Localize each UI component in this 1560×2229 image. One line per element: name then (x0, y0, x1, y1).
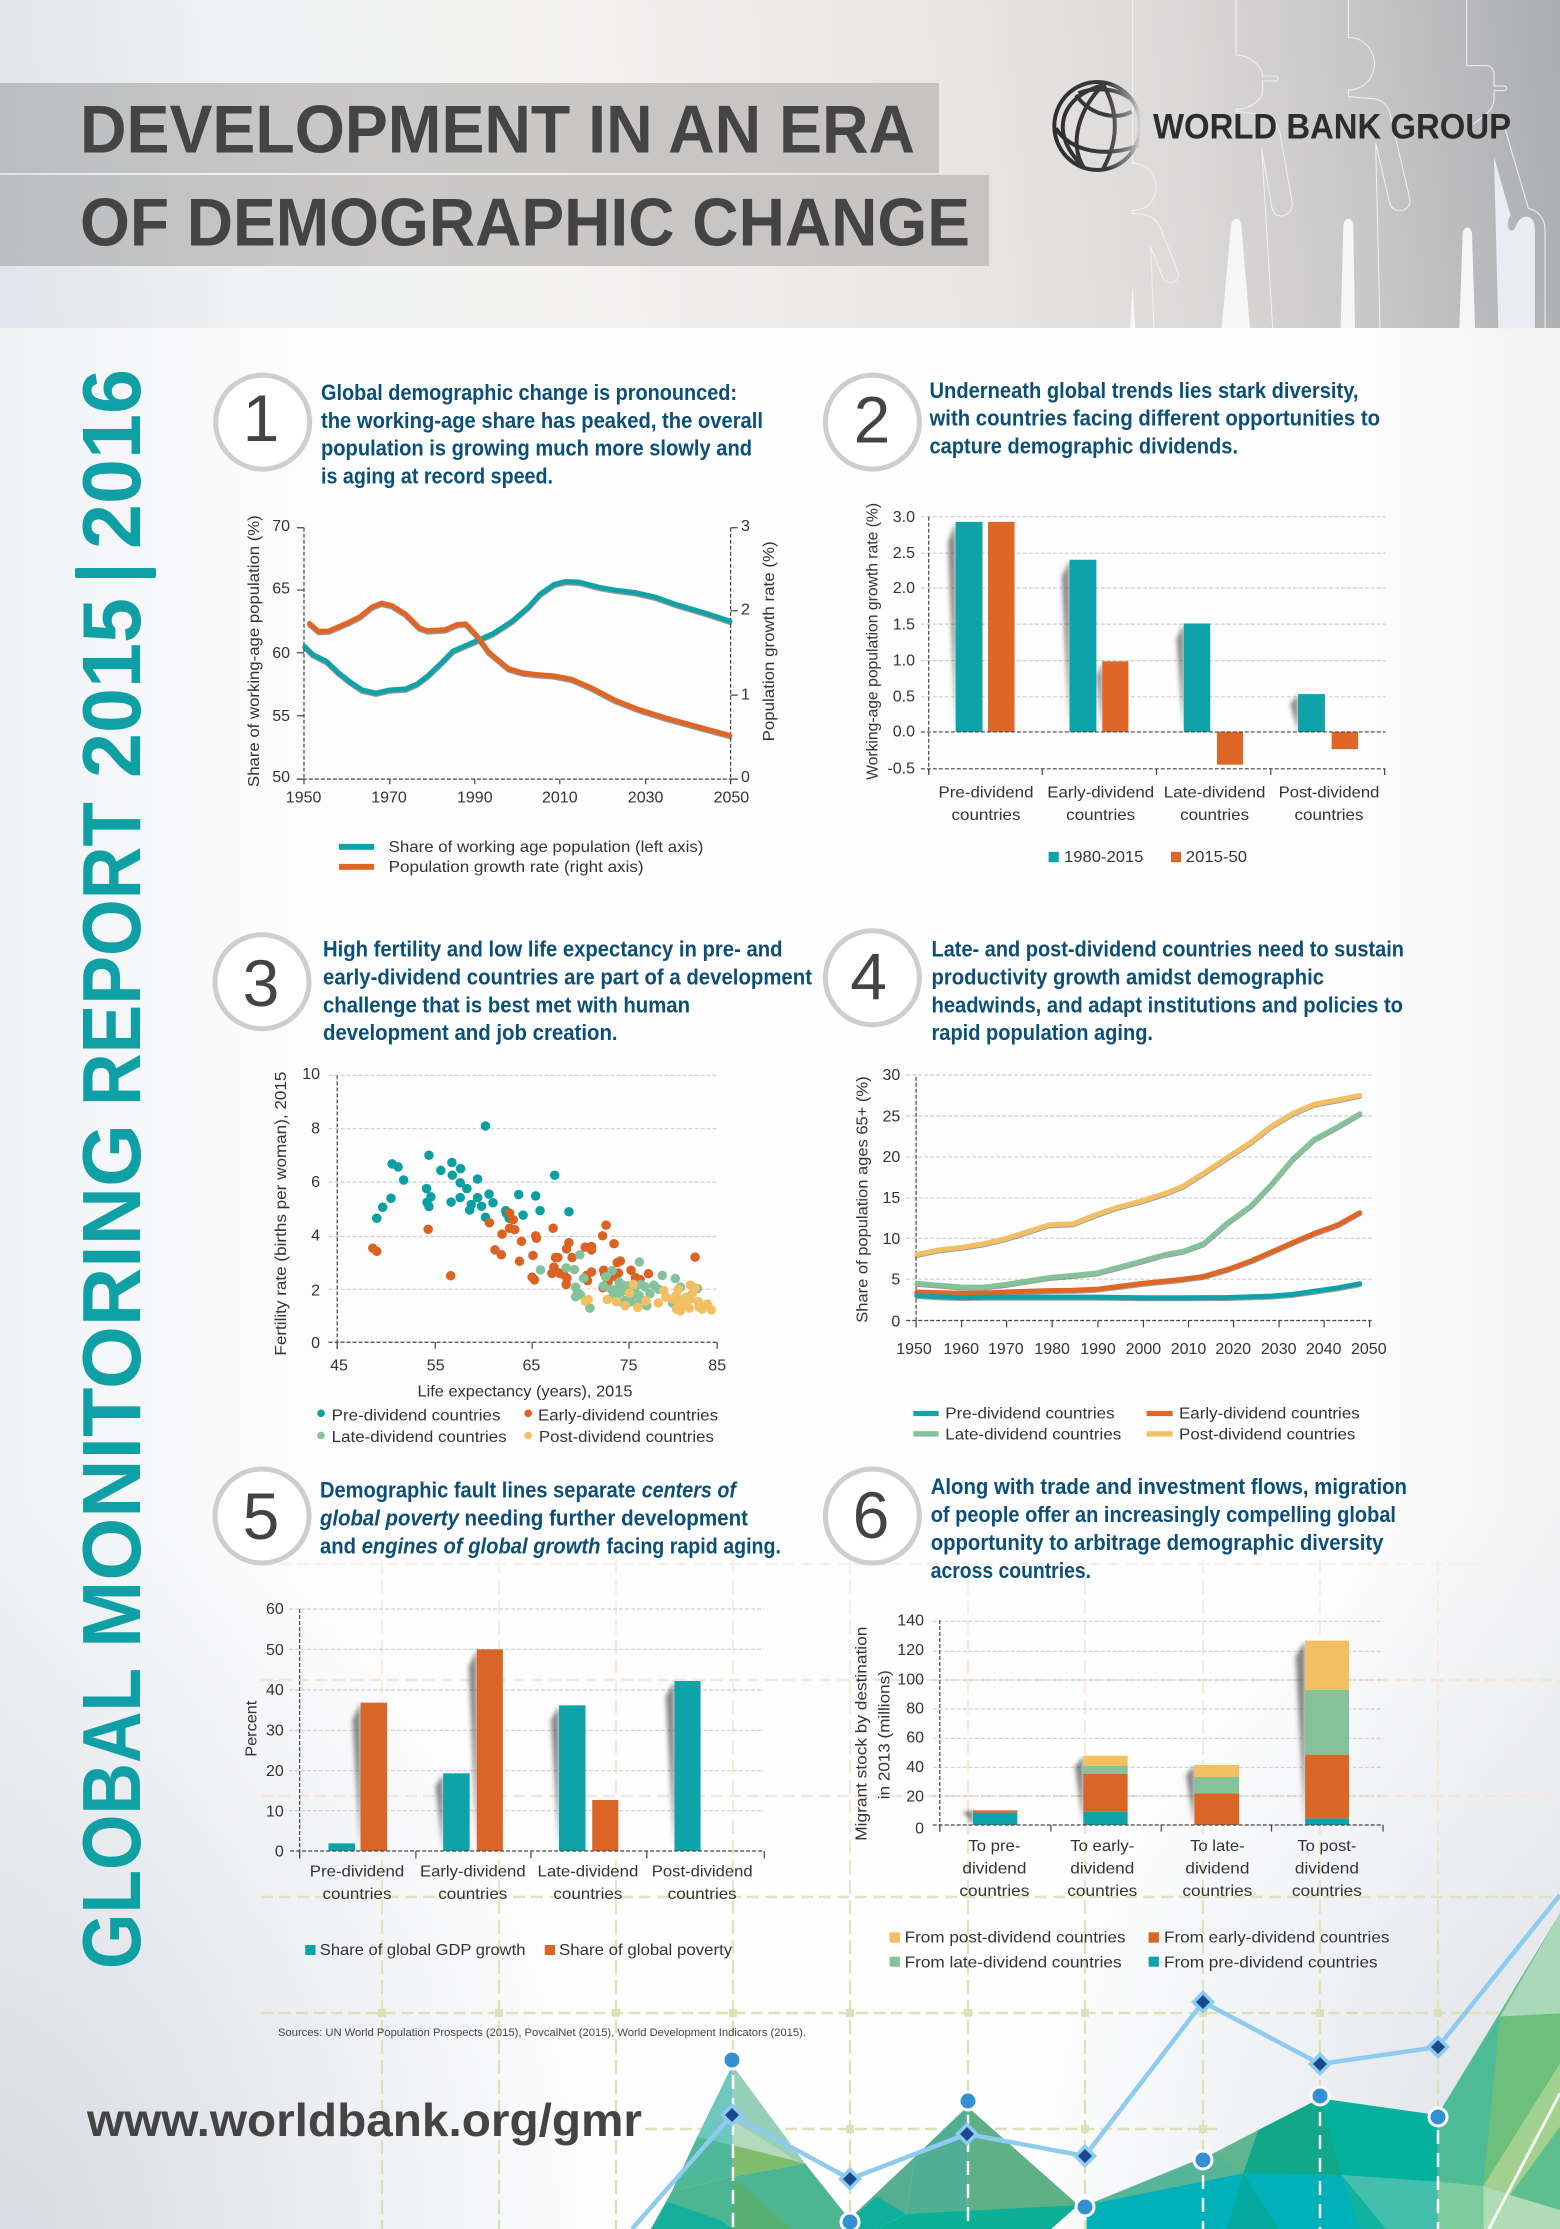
bar chart: working-age growth (864, 503, 1385, 824)
stacked bar chart: migrant stock (854, 1613, 1383, 1900)
scatter chart: fertility vs life expectancy: 6 (311, 1174, 320, 1191)
legend 3: Pre-dividend countries (332, 1408, 500, 1424)
bar chart: working-age growth: -0.5 (887, 760, 915, 777)
stacked bar chart: migrant stock: countries (1067, 1883, 1137, 1900)
legend 1: Population growth rate (right axis) (389, 859, 644, 876)
line chart: working-age share and growth rate: 2010 (542, 790, 578, 806)
bar chart: working-age growth: 2.5 (893, 545, 915, 562)
heading 1: the working-age share has peaked, the overall (321, 408, 763, 433)
line chart: share of population 65+: 1990 (1080, 1341, 1116, 1358)
heading 1: population is growing much more slowly and (321, 436, 752, 461)
panel 6 (825, 1469, 1407, 1971)
icon: globe (1054, 82, 1140, 170)
bar chart: GDP growth and poverty: countries (668, 1886, 737, 1903)
number badge 5 (215, 1469, 309, 1563)
stacked bar chart: migrant stock: in 2013 (millions) (877, 1670, 894, 1799)
diamond markers (720, 1990, 1450, 2191)
legend 3: Early-dividend countries (538, 1408, 718, 1424)
line chart: share of population 65+: 15 (883, 1190, 900, 1207)
legend 5 (305, 1942, 732, 1959)
legend 3: Late-dividend countries (332, 1429, 507, 1446)
bar chart: working-age growth: Post-dividend (1279, 784, 1379, 801)
bar chart: working-age growth: 3.0 (893, 509, 915, 526)
bar chart: GDP growth and poverty: Percent (244, 1700, 260, 1757)
logo: World Bank Group: WORLD BANK GROUP (1153, 107, 1511, 146)
heading 6: of people offer an increasingly compelling global (931, 1502, 1396, 1527)
line chart: share of population 65+: 2050 (1351, 1341, 1387, 1358)
scatter chart: fertility vs life expectancy (273, 1066, 726, 1400)
scatter chart: fertility vs life expectancy: 8 (311, 1120, 320, 1138)
bar chart: GDP growth and poverty (244, 1601, 764, 1903)
number badge 2 (825, 375, 919, 469)
side title: 2015 (65, 598, 158, 778)
line chart: share of population 65+: 2030 (1261, 1341, 1297, 1358)
heading 5: centers of (642, 1477, 738, 1502)
bar chart: working-age growth: Working-age population growth rate (%) (864, 503, 881, 780)
heading 4: headwinds, and adapt institutions and policies to (932, 992, 1403, 1017)
circle markers (723, 2051, 1447, 2229)
title (0, 83, 989, 266)
line chart: share of population 65+: 2020 (1215, 1341, 1251, 1358)
heading 6: opportunity to arbitrage demographic diversity (931, 1530, 1384, 1555)
mountain peaks (650, 2065, 1078, 2229)
legend 1 (339, 839, 703, 876)
line chart: working-age share and growth rate: 55 (272, 708, 290, 725)
stacked bar chart: migrant stock: dividend (1070, 1860, 1134, 1877)
heading 5: and (320, 1533, 356, 1558)
line chart: working-age share and growth rate: 50 (272, 769, 290, 786)
number badge 6 (825, 1469, 919, 1563)
stacked bar chart: migrant stock: To early- (1070, 1838, 1134, 1855)
line chart: working-age share and growth rate: 70 (272, 518, 290, 535)
legend 4 (913, 1405, 1360, 1443)
bar chart: working-age growth: Early-dividend (1047, 784, 1154, 801)
stacked bar chart: migrant stock: To post- (1297, 1838, 1356, 1855)
number badge 3: 3 (243, 946, 279, 1020)
stacked bar chart: migrant stock: 120 (897, 1642, 924, 1659)
number badge 4: 4 (850, 940, 887, 1014)
line chart: working-age share and growth rate: Population growth rate (%) (761, 541, 778, 741)
line chart: working-age share and growth rate (246, 515, 778, 806)
bar chart: GDP growth and poverty: 20 (266, 1763, 284, 1780)
bar chart: working-age growth: countries (952, 807, 1020, 824)
scatter chart: fertility vs life expectancy: 0 (311, 1335, 320, 1352)
bar chart: working-age growth: 2.0 (893, 580, 915, 597)
number badge 3 (215, 935, 309, 1029)
side title (65, 369, 158, 1969)
scatter chart: fertility vs life expectancy: 2 (311, 1282, 320, 1299)
heading 1 (321, 380, 763, 489)
stacked bar chart: migrant stock: dividend (1295, 1860, 1359, 1877)
number badge 6: 6 (853, 1478, 889, 1552)
stacked bar chart: migrant stock: 100 (897, 1671, 924, 1688)
header band with silhouettes (0, 0, 1560, 328)
heading 2: with countries facing different opportunities to (929, 406, 1380, 431)
panel 1 (216, 375, 778, 876)
scatter chart: fertility vs life expectancy: 75 (620, 1358, 638, 1375)
heading 6: Along with trade and investment flows, migration (931, 1474, 1407, 1499)
line chart: working-age share and growth rate: 2030 (628, 790, 663, 806)
heading 4 (932, 936, 1404, 1045)
side title: MONITORING (65, 1124, 158, 1648)
line chart: working-age share and growth rate: 60 (272, 645, 290, 662)
legend 6: From early-dividend countries (1164, 1930, 1389, 1947)
number badge 2: 2 (854, 383, 890, 457)
stacked bar chart: migrant stock: To late- (1190, 1838, 1245, 1855)
scatter chart: fertility vs life expectancy: 85 (708, 1358, 726, 1375)
bar chart: GDP growth and poverty: 10 (266, 1804, 284, 1821)
stacked bar chart: migrant stock: 60 (906, 1730, 924, 1747)
rising polygons right (1087, 1913, 1560, 2229)
heading 5: needing further development (464, 1505, 748, 1530)
bar chart: GDP growth and poverty: 30 (266, 1723, 284, 1740)
panel 2 (825, 375, 1385, 866)
heading 6 (931, 1474, 1407, 1583)
heading 3: High fertility and low life expectancy in pre- and (323, 936, 782, 962)
bar chart: GDP growth and poverty: Late-dividend (538, 1864, 638, 1881)
line chart (632, 1895, 1560, 2229)
line chart: share of population 65+: 2000 (1126, 1341, 1161, 1358)
heading 5: Demographic fault lines separate (320, 1477, 636, 1502)
scatter chart: fertility vs life expectancy: Life expectancy (years), 2015 (418, 1383, 633, 1400)
stacked bar chart: migrant stock: 20 (906, 1788, 924, 1805)
legend 6: From post-dividend countries (905, 1930, 1126, 1947)
legend 1: Share of working age population (left axis) (389, 839, 703, 856)
bottom decoration: mountains and line chart (632, 1895, 1560, 2229)
bar chart: GDP growth and poverty: Early-dividend (420, 1864, 526, 1881)
legend 3 (317, 1408, 718, 1446)
line chart: working-age share and growth rate: 1990 (457, 790, 493, 806)
line chart: share of population 65+: 2010 (1171, 1341, 1206, 1358)
white dashed verticals (733, 2075, 1438, 2229)
panel 3 (215, 935, 812, 1446)
logo: World Bank Group (1054, 82, 1511, 170)
legend 6: From late-dividend countries (905, 1954, 1122, 1971)
number badge 5: 5 (243, 1479, 279, 1553)
stacked bar chart: migrant stock: countries (1182, 1883, 1252, 1900)
panel 4 (825, 931, 1404, 1443)
stacked bar chart: migrant stock: dividend (1185, 1860, 1249, 1877)
bar chart: working-age growth: 0.5 (893, 689, 915, 706)
bar chart: working-age growth: countries (1180, 807, 1249, 824)
sources note: Sources: UN World Population Prospects (2015), PovcalNet (2015), World Development Indicators (2015). (278, 2027, 806, 2039)
bar chart: GDP growth and poverty: Post-dividend (652, 1864, 753, 1881)
line chart: share of population 65+: 1980 (1034, 1341, 1070, 1358)
bar chart: GDP growth and poverty: Pre-dividend (310, 1864, 404, 1881)
legend 4: Pre-dividend countries (945, 1405, 1115, 1422)
line chart: share of population 65+: 5 (891, 1271, 900, 1288)
stacked bar chart: migrant stock: countries (1292, 1883, 1362, 1900)
line chart: share of population 65+: 25 (883, 1108, 900, 1126)
heading 4: rapid population aging. (932, 1020, 1153, 1045)
bar chart: working-age growth: countries (1066, 807, 1135, 824)
legend 2: 1980-2015 (1064, 849, 1144, 866)
website url: www.worldbank.org/gmr (86, 2094, 642, 2146)
heading 2 (929, 378, 1380, 458)
heading 4: productivity growth amidst demographic (932, 964, 1324, 989)
bar chart: GDP growth and poverty: countries (438, 1886, 507, 1903)
heading 3: challenge that is best met with human (323, 992, 690, 1017)
bar chart: working-age growth: Pre-dividend (938, 784, 1034, 801)
scatter chart: fertility vs life expectancy: 45 (330, 1358, 348, 1375)
number badge 1 (216, 375, 310, 469)
legend 4: Late-dividend countries (945, 1426, 1121, 1443)
stacked bar chart: migrant stock: Migrant stock by destination (854, 1627, 871, 1841)
scatter chart: fertility vs life expectancy: 65 (523, 1358, 540, 1375)
stacked bar chart: migrant stock: To pre- (968, 1838, 1020, 1855)
title: OF DEMOGRAPHIC CHANGE (80, 184, 970, 260)
legend 6 (890, 1930, 1389, 1971)
bar chart: working-age growth: 1.5 (893, 616, 915, 633)
line chart: share of population 65+: 10 (883, 1231, 900, 1248)
scatter chart: fertility vs life expectancy: Fertility rate (births per woman), 2015 (273, 1071, 290, 1356)
line chart: share of population 65+: 1950 (896, 1341, 932, 1358)
heading 5: engines of global growth (362, 1533, 600, 1558)
line chart: working-age share and growth rate: 1970 (371, 790, 407, 806)
legend 2 (1049, 849, 1247, 866)
number badge 4 (825, 931, 919, 1025)
heading 4: Late- and post-dividend countries need to sustain (932, 936, 1404, 962)
line chart: share of population 65+: 1970 (988, 1341, 1024, 1358)
line chart: working-age share and growth rate: 2050 (714, 790, 749, 806)
panel 5 (215, 1469, 781, 1959)
legend 2: 2015-50 (1186, 849, 1247, 866)
side title: 2016 (65, 369, 158, 549)
heading 6: across countries. (931, 1558, 1091, 1583)
stacked bar chart: migrant stock: dividend (962, 1860, 1026, 1877)
stacked bar chart: migrant stock: 0 (915, 1820, 924, 1837)
scatter chart: fertility vs life expectancy: 55 (427, 1358, 445, 1375)
bar chart: GDP growth and poverty: 50 (266, 1642, 284, 1659)
bar chart: GDP growth and poverty: 60 (266, 1601, 284, 1618)
heading 3 (323, 936, 812, 1045)
line chart: share of population 65+: 20 (883, 1149, 900, 1166)
bar chart: GDP growth and poverty: 40 (266, 1682, 284, 1699)
legend 4: Post-dividend countries (1179, 1426, 1355, 1443)
bar chart: working-age growth: Late-dividend (1164, 784, 1265, 801)
legend 3: Post-dividend countries (539, 1429, 714, 1446)
legend 4: Early-dividend countries (1179, 1405, 1360, 1422)
legend 5: Share of global poverty (559, 1942, 732, 1959)
stacked bar chart: migrant stock: 40 (906, 1759, 924, 1776)
line chart: working-age share and growth rate: Share of working-age population (%) (246, 515, 263, 787)
line chart: working-age share and growth rate: 0 (741, 769, 750, 786)
heading 5 (319, 1477, 781, 1558)
scatter chart: fertility vs life expectancy: 10 (302, 1066, 320, 1083)
number badge 1: 1 (243, 381, 279, 455)
stacked bar chart: migrant stock: 140 (897, 1613, 924, 1630)
heading 3: development and job creation. (323, 1020, 618, 1045)
side title: GLOBAL (65, 1668, 158, 1969)
side title: REPORT (65, 802, 158, 1106)
line chart: working-age share and growth rate: 3 (741, 518, 750, 535)
line chart: share of population 65+: 30 (883, 1067, 900, 1084)
line chart: working-age share and growth rate: 65 (272, 580, 290, 598)
stacked bar chart: migrant stock: 80 (906, 1700, 924, 1717)
bar chart: working-age growth: countries (1294, 807, 1364, 824)
line chart: working-age share and growth rate: 2 (741, 602, 750, 619)
legend 5: Share of global GDP growth (320, 1942, 525, 1959)
bar chart: working-age growth: 0.0 (893, 723, 915, 740)
line chart: share of population 65+: 0 (891, 1313, 900, 1330)
line chart: working-age share and growth rate: 1 (741, 686, 750, 703)
background dashed grid (261, 1560, 1560, 2229)
bar chart: GDP growth and poverty: 0 (275, 1844, 284, 1861)
line chart: share of population 65+: 1960 (943, 1341, 979, 1358)
heading 2: Underneath global trends lies stark diversity, (930, 378, 1358, 403)
heading 5: facing rapid aging. (606, 1533, 781, 1558)
silhouettes of people (1130, 0, 1545, 328)
bar chart: working-age growth: 1.0 (893, 652, 915, 670)
heading 3: early-dividend countries are part of a development (323, 964, 812, 989)
title: DEVELOPMENT IN AN ERA (80, 92, 915, 168)
stacked bar chart: migrant stock: countries (959, 1883, 1029, 1900)
line chart: share of population 65+: Share of population ages 65+ (%) (854, 1076, 871, 1323)
scatter chart: fertility vs life expectancy: 4 (311, 1227, 320, 1244)
heading 5: global poverty (319, 1505, 460, 1530)
bar chart: GDP growth and poverty: countries (553, 1886, 622, 1903)
heading 1: Global demographic change is pronounced: (321, 380, 737, 405)
legend 6: From pre-dividend countries (1164, 1954, 1378, 1971)
bar chart: GDP growth and poverty: countries (322, 1886, 392, 1903)
line chart: share of population 65+ (854, 1067, 1387, 1358)
line chart: working-age share and growth rate: 1950 (286, 790, 321, 806)
heading 1: is aging at record speed. (321, 464, 553, 489)
line chart: share of population 65+: 2040 (1306, 1341, 1342, 1358)
heading 2: capture demographic dividends. (930, 434, 1238, 458)
